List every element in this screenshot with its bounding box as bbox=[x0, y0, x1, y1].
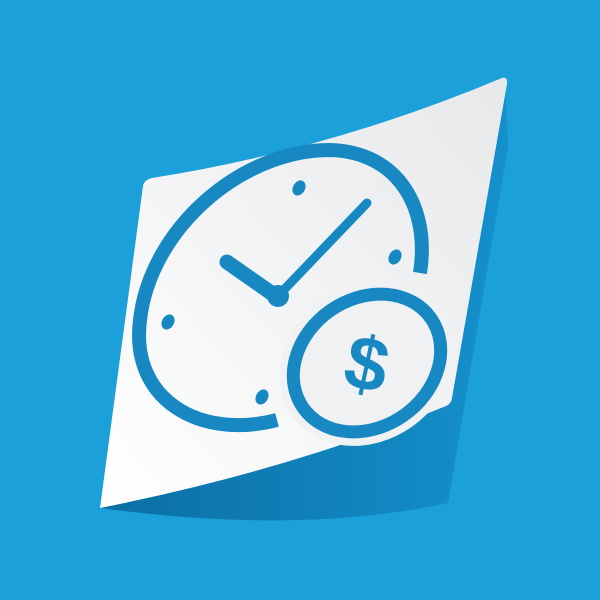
clock hands bbox=[227, 203, 367, 307]
icon: dollar coin: $ bbox=[337, 319, 396, 410]
sticker bbox=[100, 78, 507, 508]
icon: clock bbox=[139, 150, 422, 425]
clock ticks bbox=[159, 178, 404, 407]
sticker shadow curl bbox=[100, 77, 508, 520]
icon: dollar coin bbox=[247, 246, 487, 480]
